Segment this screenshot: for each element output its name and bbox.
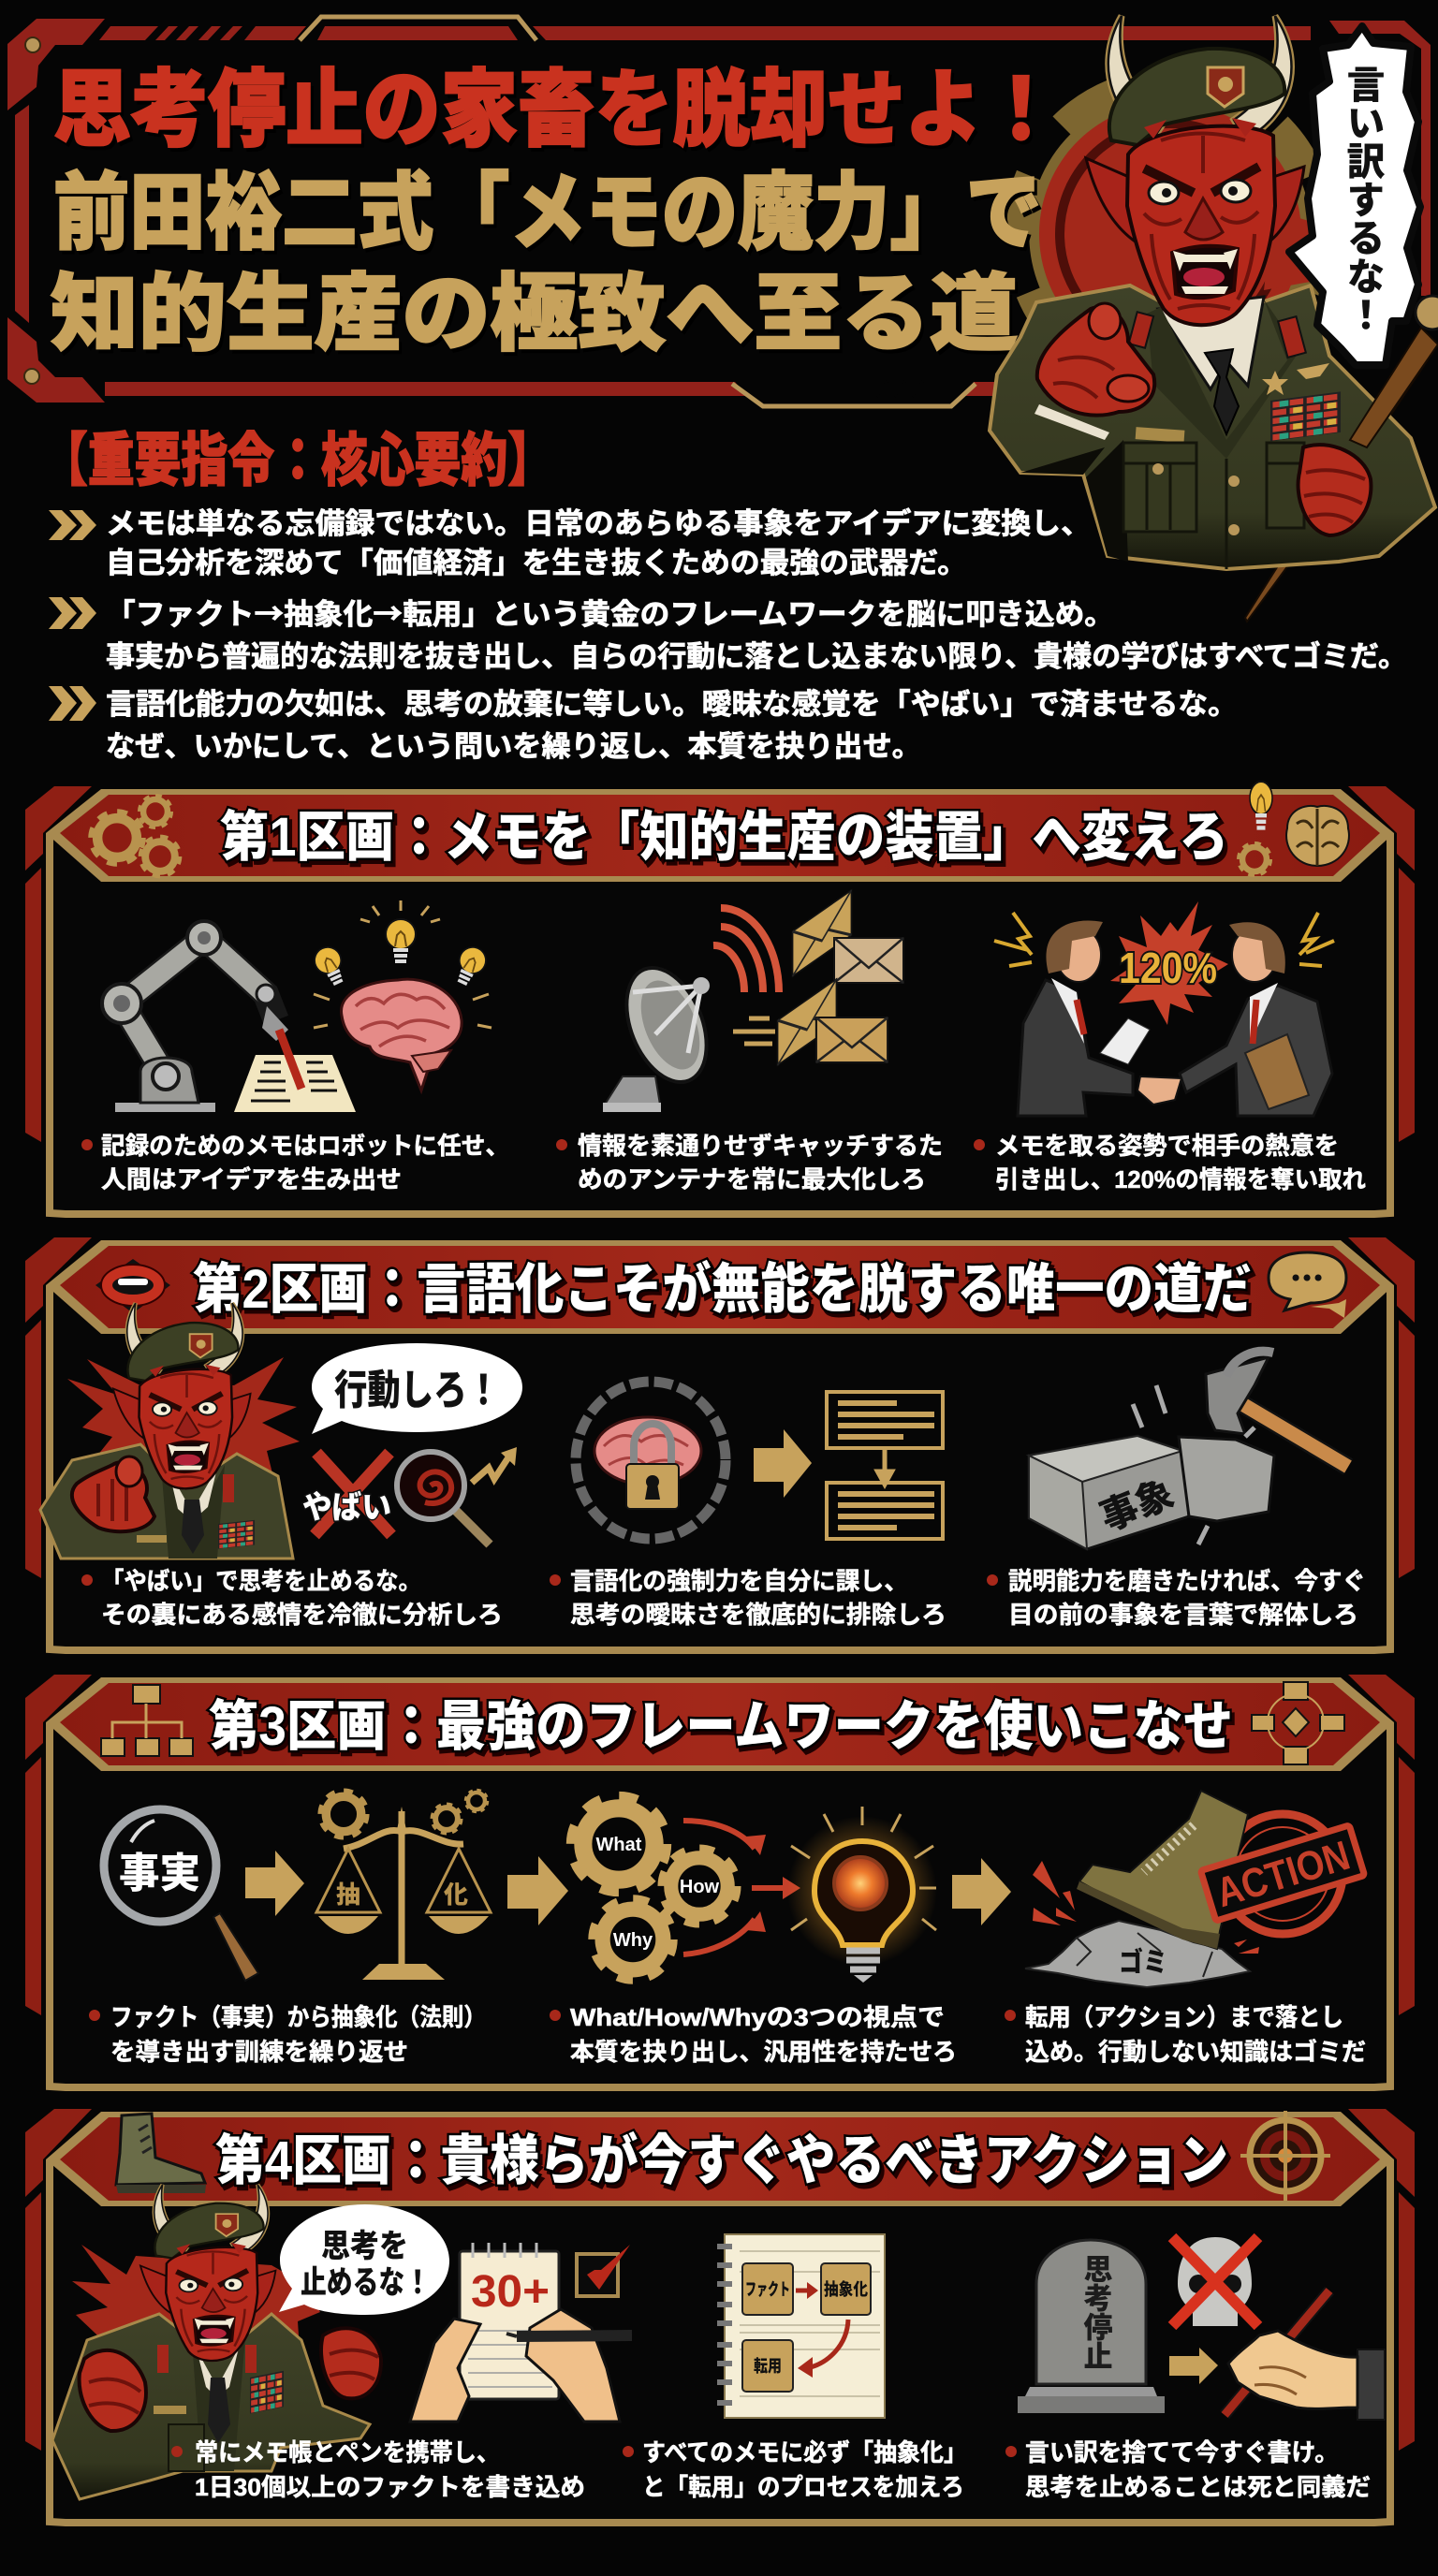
icon: boot crushing trash with ACTION stamp xyxy=(1025,1791,1365,1987)
icon: What How Why gears: How xyxy=(680,1877,720,1897)
caption column 3: メモを取る姿勢で相手の熱意を xyxy=(995,1132,1339,1160)
icon: handshake with 120% burst: 120% xyxy=(1119,944,1217,992)
section 1 heading: 第1区画：メモを「知的生産の装置」へ変えろ xyxy=(220,807,1228,868)
section 3 heading: 第3区画：最強のフレームワークを使いこなせ xyxy=(209,1696,1233,1757)
icon: magnifier with 事実: 事実 xyxy=(119,1851,200,1896)
icon: satellite dish and envelopes xyxy=(603,890,903,1112)
icon: hammer smashing block xyxy=(1029,1352,1348,1549)
caption column 2: すべてのメモに必ず「抽象化」 xyxy=(642,2438,967,2466)
speech bubble: 思考を止めるな: 思考を xyxy=(321,2229,408,2264)
icon: notebook with process: ファクト xyxy=(745,2280,790,2299)
pointing hand xyxy=(1034,404,1109,440)
summary bullet 2 xyxy=(106,591,1407,673)
summary bullet 1: 自己分析を深めて「価値経済」を生き抜くための最強の武器だ。 xyxy=(106,547,967,579)
icon: target xyxy=(1240,2111,1330,2201)
caption column 2: 言語化の強制力を自分に課し、 xyxy=(570,1567,908,1595)
caption column 3: 思考を止めることは死と同義だ xyxy=(1025,2473,1371,2501)
title: 知的生産の極致へ至る道 xyxy=(51,268,1018,361)
caption column 1: を導き出す訓練を繰り返せ xyxy=(110,2038,408,2066)
caption column 2 xyxy=(550,1567,946,1629)
panel: section 4 xyxy=(25,2109,1415,2523)
speech bubble: 言い訳するな: 言い訳するな！ xyxy=(1341,65,1384,333)
caption column 1: 「やばい」で思考を止めるな。 xyxy=(101,1567,421,1595)
caption column 3: 込め。行動しない知識はゴミだ xyxy=(1025,2038,1366,2066)
summary bullet 3: 言語化能力の欠如は、思考の放棄に等しい。曖昧な感覚を「やばい」で済ませるな。 xyxy=(106,688,1238,721)
header panel xyxy=(7,16,1438,622)
speech bubble: 行動しろ: 行動しろ！ xyxy=(334,1368,500,1413)
icon: gears xyxy=(92,796,180,876)
gear backdrop xyxy=(1023,87,1322,381)
icon: scale 抽象化: 抽 xyxy=(336,1881,360,1909)
fist and baton grip xyxy=(1299,445,1371,535)
icon: What How Why gears: What xyxy=(596,1835,642,1855)
caption column 1 xyxy=(171,2438,585,2501)
arrow xyxy=(1169,2348,1218,2384)
title: 思考停止の家畜を脱却せよ！ xyxy=(53,64,1060,157)
header frame xyxy=(7,17,1431,406)
icon: notebook with process: 抽象化 xyxy=(824,2279,868,2299)
caption column 2 xyxy=(623,2438,967,2501)
title: 前田裕二式「メモの魔力」で xyxy=(53,167,1042,260)
icon: hands writing on notepad: 30+ xyxy=(471,2267,550,2317)
caption column 2: What/How/Whyの3つの視点で xyxy=(570,2003,945,2031)
summary bullet 2: 事実から普遍的な法則を抜き出し、自らの行動に落とし込まない限り、貴様の学びはすべてゴミだ。 xyxy=(106,640,1407,673)
icon: flow diagram xyxy=(1252,1682,1344,1764)
icon: hands writing on notepad xyxy=(410,2243,632,2422)
icon: bulb and brain xyxy=(1239,782,1349,875)
icon: handshake with 120% burst xyxy=(994,901,1334,1116)
summary bullet 2: 「ファクト→抽象化→転用」という黄金のフレームワークを脳に叩き込め。 xyxy=(106,591,1114,633)
icon: crossed out skull xyxy=(1172,2237,1258,2326)
summary bullet 1: メモは単なる忘備録ではない。日常のあらゆる事象をアイデアに変換し、 xyxy=(106,507,1091,540)
speech bubble: 思考を止めるな: 止めるな！ xyxy=(301,2265,431,2301)
arrow xyxy=(952,1858,1011,1925)
arrow xyxy=(245,1851,304,1916)
caption column 3: 言い訳を捨てて今すぐ書け。 xyxy=(1025,2438,1339,2466)
summary heading: 【重要指令：核心要約】 xyxy=(41,429,554,493)
caption column 3: 目の前の事象を言葉で解体しろ xyxy=(1008,1601,1358,1629)
caption column 2: 情報を素通りせずキャッチするた xyxy=(578,1132,943,1160)
section 3 frame xyxy=(25,1675,1415,2087)
title xyxy=(51,64,1060,361)
icon: glowing light bulb xyxy=(787,1807,937,1983)
icon: brain locked in chain xyxy=(576,1382,726,1539)
speech bubble: 思考を止めるな xyxy=(279,2204,449,2315)
icon: What How Why gears xyxy=(572,1797,800,1979)
icon: chat bubbles xyxy=(1269,1252,1346,1318)
icon: scale 抽象化: 化 xyxy=(444,1881,468,1909)
panel: section 2 xyxy=(25,1237,1415,1650)
icon: hammer smashing block: 事象 xyxy=(1094,1472,1180,1539)
summary bullet 3 xyxy=(106,688,1238,763)
icon: tombstone: 思考停止 xyxy=(1078,2254,1112,2370)
caption column 1: その裏にある感情を冷徹に分析しろ xyxy=(101,1601,503,1629)
caption column 2: と「転用」のプロセスを加えろ xyxy=(642,2473,964,2501)
icon: chevrons 2 xyxy=(49,597,96,629)
caption column 3 xyxy=(987,1567,1366,1629)
section 2 frame xyxy=(25,1237,1415,1650)
caption column 1 xyxy=(81,1132,509,1193)
caption column 1 xyxy=(89,2003,486,2066)
caption column 1 xyxy=(81,1567,503,1629)
icon: magnifier with 事実 xyxy=(104,1809,258,1981)
panel: section 1 xyxy=(25,782,1415,1214)
caption column 2 xyxy=(550,2003,957,2066)
caption column 3 xyxy=(974,1132,1366,1193)
icon: notebook with process: 転用 xyxy=(754,2357,782,2376)
arrow xyxy=(754,1429,812,1498)
caption column 1: 人間はアイデアを生み出せ xyxy=(101,1165,402,1193)
devil illustration xyxy=(40,1303,300,1559)
caption column 1: ファクト（事実）から抽象化（法則） xyxy=(110,2003,486,2031)
icon: What How Why gears: Why xyxy=(613,1930,653,1951)
icon: crossed out やばい with magnifier xyxy=(302,1447,517,1544)
icon: hand writing with pen xyxy=(1225,2291,1385,2420)
icon: medals xyxy=(1270,391,1341,441)
panel: section 3 xyxy=(25,1675,1415,2087)
icon: crossed out やばい with magnifier: やばい xyxy=(302,1490,391,1526)
caption column 2 xyxy=(556,1132,943,1193)
icon: boot crushing trash with ACTION stamp: ACTION xyxy=(1211,1833,1355,1916)
icon: chevrons 3 xyxy=(49,686,96,721)
summary bullet 3: なぜ、いかにして、という問いを繰り返し、本質を抉り出せ。 xyxy=(106,730,921,763)
caption column 1: 1日30個以上のファクトを書き込め xyxy=(195,2473,585,2501)
speech bubble: 行動しろ xyxy=(312,1343,522,1434)
caption column 2: めのアンテナを常に最大化しろ xyxy=(578,1165,926,1193)
icon: tombstone xyxy=(1018,2240,1165,2413)
section 4 frame xyxy=(25,2109,1415,2523)
icon: boot xyxy=(116,2114,206,2193)
summary block xyxy=(41,429,1407,763)
caption column 2: 思考の曖昧さを徹底的に排除しろ xyxy=(570,1601,946,1629)
section 4 heading: 第4区画：貴様らが今すぐやるべきアクション xyxy=(215,2130,1228,2191)
section 2 heading: 第2区画：言語化こそが無能を脱する唯一の道だ xyxy=(193,1259,1252,1320)
section 1 frame xyxy=(25,786,1415,1214)
caption column 2: 本質を抉り出し、汎用性を持たせろ xyxy=(570,2038,957,2066)
icon: document restructure xyxy=(827,1392,943,1539)
summary bullet 1 xyxy=(106,507,1091,579)
arrow xyxy=(507,1856,568,1925)
icon: chevrons 1 xyxy=(49,510,96,540)
icon: boot crushing trash with ACTION stamp: ゴミ xyxy=(1119,1946,1167,1978)
caption column 1: 常にメモ帳とペンを携帯し、 xyxy=(195,2438,500,2466)
caption column 3: 説明能力を磨きたければ、今すぐ xyxy=(1008,1567,1366,1595)
devil general illustration xyxy=(990,16,1438,622)
speech bubble: 言い訳するな xyxy=(1289,26,1420,365)
icon: scale 抽象化 xyxy=(316,1790,491,1980)
icon: lips xyxy=(95,1259,170,1313)
caption column 3 xyxy=(1005,2003,1366,2066)
caption column 3: 転用（アクション）まで落とし xyxy=(1025,2003,1343,2031)
icon: robot arm writing and brain xyxy=(102,900,492,1112)
caption column 1: 記録のためのメモはロボットに任せ、 xyxy=(101,1132,509,1160)
caption column 3: 引き出し、120%の情報を奪い取れ xyxy=(995,1165,1366,1193)
icon: notebook with process xyxy=(717,2234,885,2418)
icon: org chart xyxy=(101,1685,193,1756)
devil illustration xyxy=(52,2185,381,2499)
caption column 3 xyxy=(1005,2438,1371,2501)
